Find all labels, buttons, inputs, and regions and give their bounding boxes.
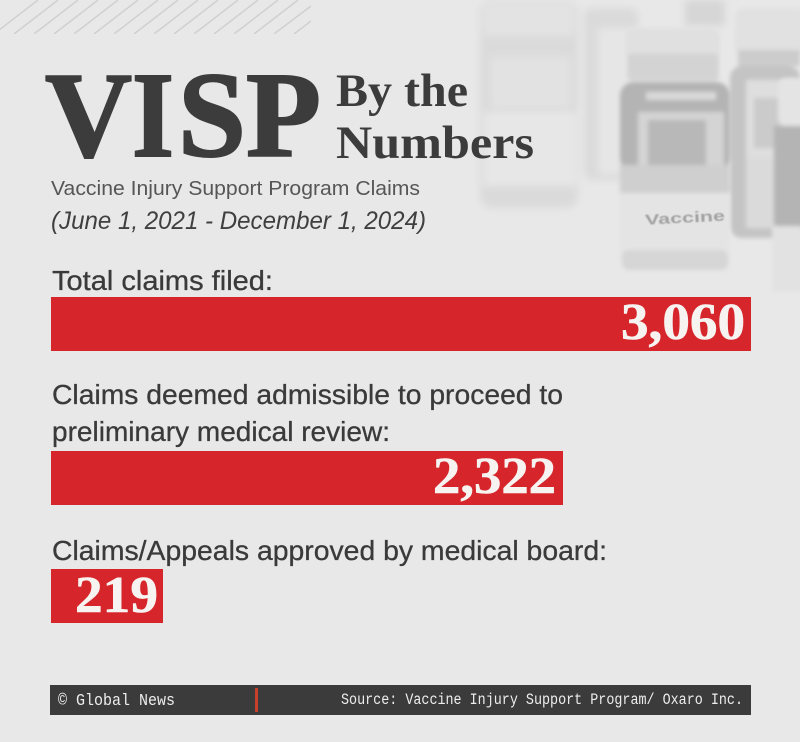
panel: total claims filed bbox=[51, 265, 751, 351]
photo: vaccine vials bbox=[480, 0, 800, 292]
vial: far right bbox=[770, 76, 800, 238]
vial label text: Vaccine bbox=[645, 208, 725, 229]
bar bbox=[51, 569, 163, 623]
footer red divider bbox=[255, 688, 258, 712]
decorative hatch pattern bbox=[0, 0, 311, 34]
bar bbox=[51, 297, 751, 351]
subtitle: Vaccine Injury Support Program Claims bbox=[51, 177, 420, 200]
panel: claims approved bbox=[51, 535, 607, 624]
footer bar bbox=[50, 685, 751, 715]
vial: back middle bbox=[584, 0, 725, 180]
value: 219 bbox=[75, 567, 158, 624]
title: VISP: S bbox=[178, 48, 246, 183]
footer bbox=[50, 685, 751, 715]
title: VISP bbox=[45, 48, 321, 183]
title: By the: By the bbox=[336, 65, 468, 117]
title: VISP: V bbox=[45, 48, 132, 183]
footer credit: © Global News bbox=[58, 692, 175, 711]
value: 3,060 bbox=[621, 294, 745, 351]
title: Numbers: Numbers bbox=[336, 117, 534, 169]
panel: claims deemed admissible bbox=[51, 379, 563, 505]
vial: front with label bbox=[620, 28, 730, 270]
title: VISP: P bbox=[246, 48, 321, 183]
value: 2,322 bbox=[433, 448, 556, 505]
label: Claims deemed admissible to proceed to bbox=[52, 379, 563, 410]
date range: (June 1, 2021 - December 1, 2024) bbox=[51, 207, 426, 235]
label: Claims/Appeals approved by medical board: bbox=[52, 535, 607, 566]
vial: back left bbox=[481, 32, 576, 207]
title bbox=[45, 48, 534, 183]
footer source: Source: Vaccine Injury Support Program/ Oxaro Inc. bbox=[341, 691, 743, 709]
title: VISP: I bbox=[132, 48, 174, 183]
label line 2: preliminary medical review: bbox=[52, 416, 390, 447]
label: Total claims filed: bbox=[52, 265, 273, 296]
vial: back right bbox=[728, 47, 800, 240]
bar bbox=[51, 451, 563, 505]
